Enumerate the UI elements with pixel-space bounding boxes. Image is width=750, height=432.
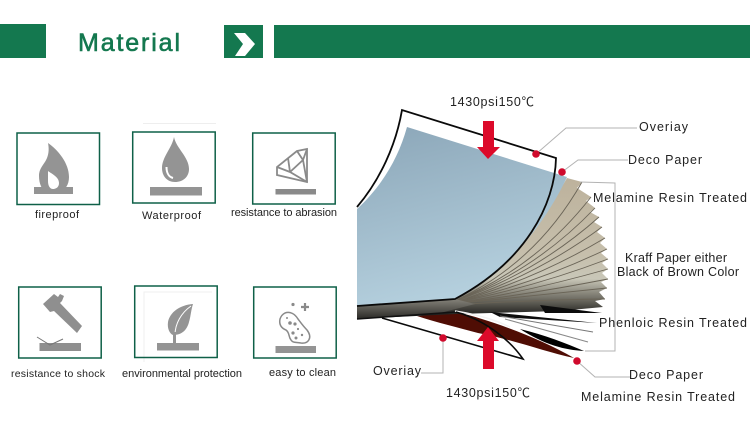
label: Melamine Resin Treated top: Melamine Resin Treated bbox=[593, 191, 747, 205]
icon: leaf bbox=[157, 304, 199, 350]
gray kraft band bbox=[357, 299, 475, 319]
icon: sponge bbox=[276, 303, 316, 353]
icon: water drop bbox=[150, 137, 202, 196]
faint box behind leaf bbox=[144, 292, 212, 362]
label: Deco Paper bottom: Deco Paper bbox=[629, 368, 703, 382]
red top arrow bbox=[477, 121, 500, 159]
label: resistance to abrasion: resistance to abrasion bbox=[231, 207, 337, 219]
panel: environmental protection bbox=[122, 286, 242, 380]
label: Kraff paper bbox=[617, 251, 739, 279]
icon: diamond bbox=[276, 149, 316, 194]
paper fan lines bbox=[452, 182, 608, 305]
label: Deco Paper top: Deco Paper bbox=[628, 153, 702, 167]
label: Overiay top: Overiay bbox=[639, 120, 689, 134]
header bar left block bbox=[0, 24, 46, 58]
label: Waterproof: Waterproof bbox=[142, 210, 202, 222]
black overlay top outline bbox=[357, 110, 556, 306]
label: environmental protection: environmental protection bbox=[122, 368, 242, 380]
chart: laminate layer diagram bbox=[357, 110, 637, 377]
red bottom arrow bbox=[477, 327, 499, 369]
label: Melamine Resin Treated bottom: Melamine Resin Treated bbox=[581, 390, 735, 404]
header bar right block bbox=[274, 25, 750, 58]
red marker dots bbox=[439, 150, 581, 365]
blue deco sheet bbox=[357, 127, 567, 306]
panel: fireproof bbox=[17, 133, 100, 221]
leader lines bbox=[421, 128, 637, 377]
icon: header chevron box bbox=[224, 25, 263, 58]
label: fireproof: fireproof bbox=[35, 209, 80, 221]
label: easy to clean: easy to clean bbox=[269, 367, 336, 379]
label: bottom pressure: 1430psi150℃ bbox=[446, 386, 530, 400]
dark fan shards bbox=[490, 305, 602, 323]
label: Phenloic Resin Treated: Phenloic Resin Treated bbox=[599, 316, 747, 330]
icon: hammer bbox=[37, 294, 82, 351]
heading: Material: Material bbox=[78, 29, 180, 57]
paper fan body bbox=[357, 178, 608, 319]
label: resistance to shock: resistance to shock bbox=[11, 368, 106, 380]
black overlay bottom outline bbox=[382, 312, 523, 359]
icon: flame bbox=[34, 143, 73, 194]
panel: resistance to shock bbox=[11, 287, 106, 380]
label: top pressure: 1430psi150℃ bbox=[450, 95, 534, 109]
label: Overiay bottom: Overiay bbox=[373, 364, 422, 378]
panel: resistance to abrasion bbox=[231, 133, 337, 219]
white strip bbox=[455, 311, 510, 327]
label: Kraff paper: Kraff Paper either bbox=[625, 251, 727, 265]
panel: easy to clean bbox=[254, 287, 336, 379]
label: Kraff paper: Black of Brown Color bbox=[617, 265, 739, 279]
panel: waterproof bbox=[133, 132, 215, 222]
dark red bottom deco layer bbox=[417, 312, 574, 358]
faint line above waterproof panel bbox=[143, 123, 216, 124]
black resin sliver bbox=[520, 329, 584, 351]
